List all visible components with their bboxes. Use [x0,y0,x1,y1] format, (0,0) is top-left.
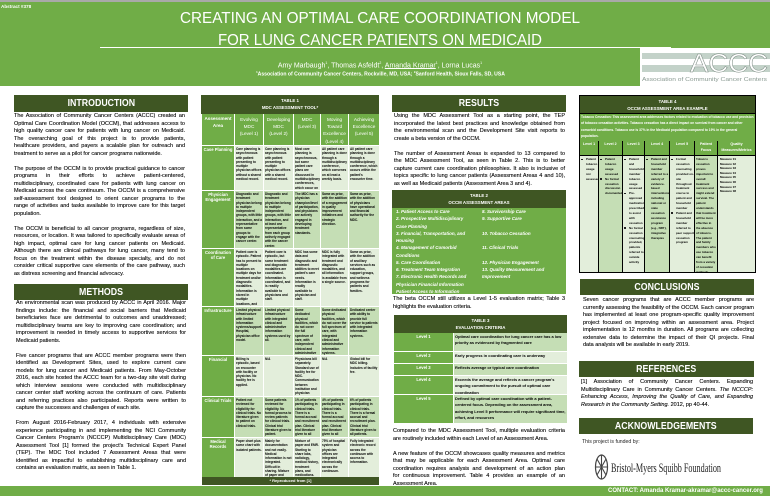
text: methods: Medicaid patients. [16,338,60,344]
table 2 list left [396,209,466,294]
text: conclusions: implementation is 12 months in duration. All programs are collecting [583,327,754,333]
table 1 grid: Same as prior, with the addition of a engagement in quality improvement initiatives and strategic direction. [322,192,347,226]
table 1 grid: Clinical Trials [204,398,232,403]
text: methods: Five cancer programs that are ACCC member programs were then [16,352,186,358]
text: methods: multidisciplinary teams are key to improving care coordination; and [16,322,186,328]
table 4 grid: Patient Focus [700,142,712,152]
table 4 intro: Tobacco Cessation: This assessment area addresses factors related to evaluation of tobacco use and provision of tobacco cessation activities. Tobacco cessation has a direct impact on survival from cancer and other comorbid conditions. Tobacco use is 37% in the Medicaid population compared to 19% in the general population. [581,115,754,138]
table 1 grid: Limited physical infrastructure with limited information systems/support. Hospital, physician office model. [236,308,262,342]
table 1 grid: Assessment Area [204,116,232,128]
text: methods: models for lung cancer and Medicaid patients. From May-October [16,368,186,374]
text: introduction: Optimal Care Coordination Model (OCCM), that addresses access to [14,120,185,126]
text: results: Using the MDC Assessment Tool as a starting point, the TEP [394,113,565,119]
table 4 grid: Level 4 [651,142,663,146]
text: conclusions: extensive data to determine the impact of their QI projects. Final [583,334,754,340]
table 1 grid: Physician Engagement [205,192,231,202]
table 1 grid: Infrastructure [204,308,232,313]
text: introduction [14,113,186,276]
heading: results: RESULTS [459,98,499,109]
table 1 grid: 75% of hospital system and physician offices are integrated electronically across the continuum. [322,439,345,473]
footer bar [0,486,770,496]
table 1 grid: Care planning is asynchronous with patient presenting to multiple physician offices with a shared medical record. [265,147,290,181]
table 4 grid: Measure 08 [720,189,736,193]
table 4 grid: Patient and household member tobacco usage assessed [629,157,644,190]
text: introduction: The overarching goal of this project is to provide patients, [14,136,185,142]
table 1 grid: Same as prior, with the addition of ancillary services such as education, support groups, and wellness programs for patients and families. [350,250,375,293]
heading: references: REFERENCES [636,364,697,374]
table 3 grid: Level 3 [416,365,431,370]
text: introduction: healthcare providers, and payers a scalable plan for outreach and [14,143,185,149]
table 1 grid: MDC has some data and diagnostic and treatment abilities to meet patient's care needs. Information is readily available to physician and staff. [295,250,319,301]
text: references: [1] Association of Community Cancer Centers. Expanding [581,379,753,385]
text: results: The number of Assessment Areas is expanded to 13 compared to [394,150,565,156]
text: methods: From August 2016-February 2017, 4 individuals with extensive [16,420,186,426]
text: methods: cancer center staff working across the continuum of care. Patients [16,390,186,396]
text: methods: Cancer Centers Program's (NCCCP) Multidisciplinary Care (MDC) [16,435,186,441]
table 1 grid: (Level 5) [355,131,373,136]
table 4 grid: Measure 02 [720,162,736,166]
text: introduction: Although there are clinical pathways for lung cancer, many tend to [14,248,185,254]
table 1 footnote [202,477,379,485]
table 2 list right: Improvement [482,274,510,279]
table 4 grid: Measure 04 [720,171,736,175]
table 3 grid: Level 2 [416,353,431,358]
table 3 grid: Defined by optimal care coordination with a patient-centered focus. Depending on the assessment area, achieving Level 5 performance will require significant time, effort, and resources [455,396,566,420]
table 4 grid: Patient and household member referred to peer support cessation program [676,211,694,244]
table 1 grid: (Level 2) [269,131,288,136]
text: introduction: resources, or location. It was tailored to specifically evaluate areas of [14,233,185,239]
table 1 grid: Financial [209,357,227,362]
table 2 title: TABLE 2 [470,193,488,198]
text: conclusions: Seven cancer programs that are ACCC member programs are [583,297,754,303]
text: introduction: population. [14,210,41,216]
text: results: the MDC Assessment Tool, as seen in Table 2. This is to better [394,158,565,164]
heading: conclusions: CONCLUSIONS [634,282,700,292]
table 4 title: OCCM ASSESSMENT AREA EXAMPLE [627,106,708,111]
text: introduction: The purpose of the OCCM is to provide practical guidance to cancer [14,166,185,172]
table 1 grid: Case Planning [204,147,232,152]
text: table 3 intro: The beta OCCM still utilizes a Level 1-5 evaluation matrix; Table 3 [393,296,565,302]
table 1 grid: Limited physical infrastructure with integrated clinical and administrative information systems used by all. [265,308,290,342]
heading: results [392,95,566,112]
table 1 title: MDC ASSESSMENT TOOL* [262,105,318,110]
abstract number: Abstract #378 [1,4,31,9]
table 1 grid: Paper chart plus some chart with isolated patients. [236,439,262,452]
heading: introduction: INTRODUCTION [67,98,135,109]
heading: acknowledgements [579,418,753,434]
table 4 grid: Measure 01 [720,157,736,161]
contact: CONTACT: Amanda Kramar-akramar@accc-cancer.org [608,488,763,494]
text: results [394,113,566,186]
text: references: Multidisciplinary Care in Community Cancer Centers. The NCCCP: [581,386,753,392]
text: table 3 intro [393,296,565,310]
table 2 list left: 6. Treatment Team Integration [396,267,460,272]
text: introduction: self-assessment tool designed to orient cancer programs to the [14,196,185,202]
text: results continued [393,428,565,486]
table 2 list right: 10. Tobacco Cessation [482,231,531,236]
table 1 grid: N/A [265,357,270,361]
text: methods: experience participating in and implementing the NCI Community [16,428,186,434]
text: introduction: range of activities and tasks available to improve care for this target [14,203,185,209]
table 2 list left: 7. Electronic Health Records and [396,274,466,279]
table 1 grid: Coordination of Care [205,250,231,260]
table 1 grid: The MDC has a physician champion/level of participation, and physicians are actively engaged in developing treatment standards. [295,192,319,235]
text: results: topics specific to lung cancer patients (Assessment Areas 4 and 10), [394,173,565,179]
table 2 list right [482,209,544,279]
table 1 grid: Patient care is episodic, but some treatment and diagnostic modalities are coordinated. Information is coordinated, and is readily available to physicians and staff. [265,250,290,301]
text: results continued: are routinely included within each Level of an Assessment Area. [393,436,548,442]
heading: methods: METHODS [79,286,123,298]
table 4 title [580,96,755,113]
text: introduction: consider critical supportive care elements of the care pathway, such [14,263,185,269]
table 1 grid: MDC is fully integrated with treatment and diagnostic modalities, and all information is available from a single source. [322,250,347,284]
text: table 3 intro: highlights the evaluation criteria. [393,304,472,310]
table 2 list right: 8. Survivorship Care [482,209,526,214]
table 1 grid: (Level 3) [298,124,316,129]
table 2 list left: Physician Financial Information [396,282,464,286]
text: results continued: coordination requires analysis and development of an action plan [393,466,565,472]
table 4 grid: Measure 05 [720,175,736,179]
table 1 grid: (Level 4) [325,139,344,144]
heading: methods [14,284,188,300]
text: introduction: as distress screening and financial advocacy. [14,270,124,276]
affiliations: 1Association of Community Cancer Centers, Rockville, MD, USA; 2Sanford Health, Sioux Falls, SD, USA [256,70,505,78]
table 1 grid: Mixture of paper and EMR. Starting to share labs, radiology, medical history, treatment plans, and medications. [295,439,319,477]
table 3 grid: Level 1 [416,334,431,339]
text: methods: capture the successes and challenges of each site. [16,405,140,411]
text: results continued: Assessment Area. [393,480,437,486]
authors: Amy Marbaugh1, Thomas Asfeldt2, Amanda Kramar1, Lorna Lucas1 [278,61,482,69]
table 2: OCCM assessment areas [392,190,566,294]
table 1 footnote: * Reproduced from [1] [269,478,312,483]
text: methods: identified as impactful to establishing multidisciplinary care and [16,458,186,464]
text: results continued: A new feature of the OCCM showcases quality measures and metrics [393,450,565,456]
text: funding note: This project is funded by: [582,439,640,445]
table 4 grid: Level 5 [676,142,688,146]
text: methods: (TEP). The MDC Tool included 7 Assessment Areas that were [16,450,186,456]
table 3 title: EVALUATION CRITERIA [456,325,505,330]
text: results: capture current care coordination philosophies. It also is inclusive of [394,166,565,172]
table 1 grid: Diagnostic and treatment physician belong to multiple independent groups, with little interaction, and a representative from some groups to engage with the cancer center. [236,192,262,243]
table 4 grid: Measure 06 [720,180,736,184]
title: FOR LUNG CANCER PATIENTS ON MEDICAID [218,32,542,49]
table 4 grid: Level 2 [604,142,617,146]
table 2 list right: 13. Quality Measurement and [482,267,544,272]
text: conclusions [583,297,754,348]
text: methods: contains an evaluation matrix, as seen in Table 1. [16,465,136,471]
table 4 grid: Measure 03 [720,166,736,170]
text: methods: which interview sessions were conducted with multidisciplinary [16,382,186,388]
text: introduction: focus on the treatment within the disease specialty, and do not [14,256,185,262]
table 1 title: TABLE 1 [281,98,299,103]
table 4 grid: Tobacco cessation proves important to overall treatment success and might extend survival. The patient understands that treatment will be more effective in the absence of tobacco. The patient and family members who use tobacco can benefit from a variety of cessation methods. [696,157,716,272]
table 2 title [392,190,566,208]
title: CREATING AN OPTIMAL CARE COORDINATION MODEL [180,10,580,27]
text: results: the environmental scan and the Development Site visit reports to [394,128,565,134]
logo: ACCC: ACCC [690,48,768,78]
text: results continued: for continuous improvement. Table 4 provides an example of an [393,473,565,479]
top grey strip [0,0,770,2]
text: methods: and referring practices also participated. Reports were written to [16,398,186,404]
table 3 grid: Reflects average or typical care coordination [455,365,539,370]
text: introduction: high quality cancer care for patients with lung cancer on Medicaid. [14,128,185,134]
heading: introduction [14,95,188,112]
table 1 grid: Some patients reviewed for eligibility. No formal process to review patients for clinical trials. Clinical trial literature given to patient. [265,398,291,436]
table 4 grid: Measure 07 [720,185,736,189]
table 1 grid [202,114,379,477]
table 2 list left: 1. Patient Access to Care [396,209,450,214]
table 1 grid: Dedicated center with ability to provide full service to patients with integrated information systems. [350,308,378,338]
text: methods: improvement is needed in timely access to supportive services for [16,330,186,336]
table 1: MDC assessment tool [201,95,379,485]
text: results continued: that may be applicable for each Assessment Area. Optimal care [393,458,565,464]
text: introduction: The OCCM is beneficial to all cancer programs, regardless of size, [14,226,185,232]
text: methods: beneficiaries face are detrimental to outcomes and unaddressed; [16,315,186,321]
table 3 grid: Early progress in coordinating care is underway [455,353,545,358]
table 2 list left: Housing [396,238,414,243]
text: methods: Assessment Tool [1] formed the project's Technical Expert Panel [16,442,186,448]
table 4 title: TABLE 4 [658,99,676,104]
logo: ACCC [640,48,770,86]
text: introduction: Medicaid across the care continuum. The OCCM is a comprehensive [14,188,185,194]
table 1 grid: Medical Records [210,439,226,449]
title underline [100,47,671,48]
heading: references [579,361,754,377]
heading: acknowledgements: ACKNOWLEDGEMENTS [615,420,717,432]
table 4 grid: Formal cessation counseling provided on-site throughout treatment course to patient and household member [676,157,694,210]
table 1 grid: Billing is episodic, based on encounter with facility or physician. No facility fee is applied. [236,357,260,387]
table 3 title: TABLE 3 [472,318,489,323]
title [180,10,580,49]
table 1 grid: 6% of patients participating in clinical trials. There is a formal accrual and recruitment plan. Clinical trial literature given to all patients. [350,398,376,436]
table 1 grid: All patient care planning is done through a multidisciplinary conference, which occurs within the patient's encounter time. [350,147,377,181]
table 2 list right: 11. Clinical Trials [482,245,518,250]
table 2 list left: Conditions [396,252,420,258]
text: conclusions: has implemented at least one program-specific quality improvement [583,312,754,318]
table 2 list left: 2. Prospective Multidisciplinary [396,216,463,221]
logo: ACCC: Association of Community Cancer Centers [642,77,767,83]
logo: Bristol-Myers Squibb Foundation [594,454,721,480]
table 4 grid: Patient tobacco usage assessed [605,157,618,176]
table 1 title [201,95,379,114]
table 1 grid: Same as prior, with the addition of physicians have operational and financial authority for the MDC. [350,192,375,222]
text: introduction: programs in their efforts to achieve patient-centered, [14,173,185,179]
table 2 title: OCCM ASSESSMENT AREAS [448,200,510,205]
header banner [0,2,770,86]
table 4: OCCM assessment area example [579,95,756,273]
table 1 grid: All patient care planning is done through a multidisciplinary conference, which convenes on at least a weekly basis. [322,147,347,181]
table 1 grid: Some dedicated physical facilities, which do not cover the full spectrum of care, with integrated clinical and administrative information systems. [322,308,346,355]
text: introduction: high impact, optimal care for lung cancer patients on Medicaid. [14,240,185,246]
table 2 list left: Patient Access to Information [396,289,459,294]
text: results: as well as Medicaid patients (Assessment Area 3 and 4). [394,180,532,186]
table 1 grid: (Level 1) [240,131,258,136]
text: methods: identified as Development Sites, used to explore current care [16,360,186,366]
heading: conclusions [580,279,754,295]
table 3 grid: Level 5 [416,396,431,401]
table 1 grid: Care planning is asynchronous with patient presenting to multiple physician offices without a shared medical record. [236,147,261,181]
table 4 grid: No formal cessation discussion documented [605,177,622,195]
text: introduction: The Association of Community Cancer Centers (ACCC) created an [14,113,185,119]
table 1 grid: Global bill for MDC billing. Includes of facility fee. [350,357,377,374]
table 1 grid: Evolving MDC [240,117,258,129]
text: conclusions: project focused on improving within an assessment area. Project [583,320,754,326]
table 4 grid: Level 3 [627,142,640,146]
text: introduction: treatment to serve as a pilot for cancer programs nationwide. [14,150,162,156]
table 1 grid: N/A [322,357,327,361]
table 4 grid [580,141,755,272]
table 1 grid: Moving Toward Excellence [323,117,346,136]
table 2 list left: Case Planning [396,224,427,228]
text: conclusions: currently assessing the feasibility of the OCCM. Each cancer program [583,304,754,310]
table 3: evaluation criteria [394,315,567,423]
table 1 grid: Achieving Excellence [353,117,375,129]
text: results continued: Compared to the MDC Assessment Tool, multiple evaluation criteria [393,428,565,434]
text: methods [16,300,186,471]
table 2 list left: 5. Care Coordination [396,260,440,265]
table 1 grid: Fully integrated electronic record across the continuum with access to information. [350,439,375,464]
text: conclusions: data analysis will be available in early 2019. [583,342,690,348]
table 1 grid: Diagnostic and treatment physician belong to multiple independent groups, with little interaction, and at least one representative from each group actively engaged with the cancer center. [265,192,291,248]
text: results: incorporated the latest best practices and knowledge obtained from [394,120,565,126]
text: methods: 2016, each site hosted the ACCC team for a two-day site visit during [16,375,186,381]
table 3 grid: Level 4 [416,377,431,382]
table 4 grid: Quality Measures/Metrics [721,142,752,152]
table 3 grid: Optimal care coordination for lung cancer care has a low priority as evidenced by fragmented care [455,334,561,345]
table 1 grid: Patient not reviewed for eligibility for clinical trials. No literature given to patient on clinical trials. [236,398,261,428]
text: methods: findings include: the financial and social barriers that Medicaid [16,308,186,314]
text: references: Research in the Community Setting. 2012, pp 40-44. [581,402,709,408]
table 3 grid [394,333,567,423]
table 2 list right: 12. Physician Engagement [482,260,539,265]
text: results: create a beta version of the OCCM. [394,136,481,142]
table 4 grid: Level 1 [583,142,595,146]
table 3 title [394,315,567,333]
table 2 list left: 3. Financial, Transportation, and [396,231,465,236]
table 1 grid: MDC [302,117,312,122]
table 2 list right: 9. Supportive Care [482,216,522,221]
text: references: Enhancing Access, Improving the Quality of Care, and Expanding [581,394,753,400]
text: methods: An environmental scan was produced by ACCC in April 2016. Major [16,300,186,306]
table 1 grid: Developing MDC [267,117,290,129]
text: references [581,379,753,408]
table 2 list left: 4. Management of Comorbid [396,245,457,250]
text: introduction: multidisciplinary, coordinated care for patients with lung cancer on [14,180,185,186]
